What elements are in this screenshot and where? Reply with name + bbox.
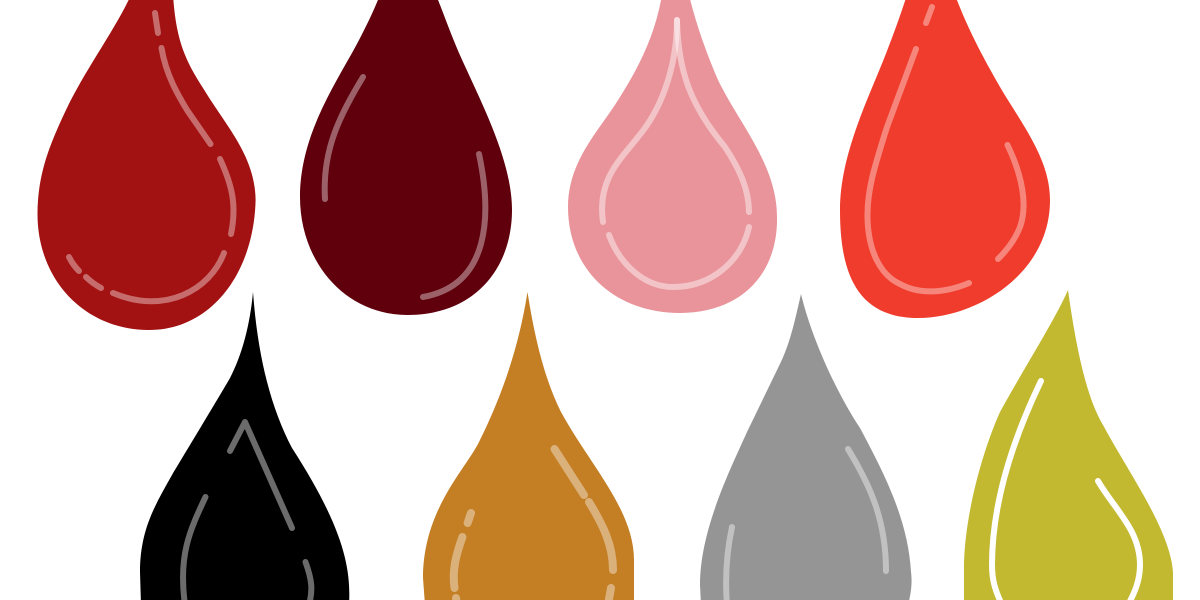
drop: pink — [568, 0, 777, 313]
drop: olive — [964, 290, 1173, 600]
drop: dark red — [37, 0, 256, 330]
drop: black — [140, 292, 349, 600]
drop: ochre — [423, 292, 634, 600]
drop: bright red — [840, 0, 1050, 318]
drop: gray — [700, 294, 912, 600]
drop: maroon — [300, 0, 512, 315]
